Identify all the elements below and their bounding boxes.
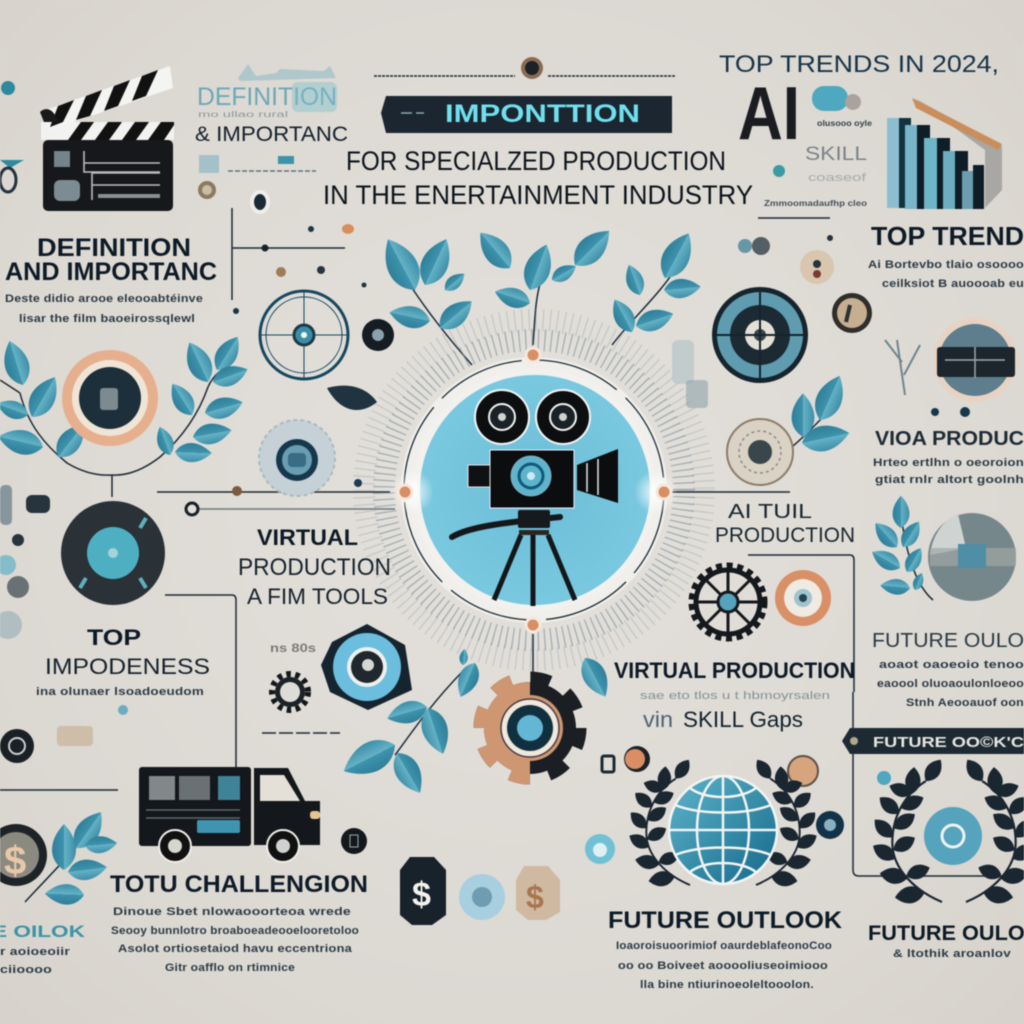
- dark disc with teal center: [61, 501, 165, 605]
- bottom-left coin: [0, 824, 47, 886]
- body text: challenge: Seooy bunnlotro broaboeadeooelooretoloo: [111, 925, 359, 937]
- heading: challenge: TOTU CHALLENGION: [110, 871, 368, 898]
- heading: definition and importance: [5, 234, 217, 286]
- teal outlook fragment: r aoioeoiir: [0, 946, 71, 958]
- center-right leaves: [792, 371, 852, 455]
- brown marker and ring dot: [186, 479, 362, 515]
- body: via production: [873, 457, 1024, 486]
- hexagon lens: [321, 624, 412, 710]
- small truck side coin: [341, 828, 367, 854]
- heading: ai tool production: AI TUIL: [728, 501, 812, 523]
- heading: top impodeness: TOP: [87, 625, 141, 650]
- bottom-left coin: $: [4, 839, 26, 883]
- top banner: [381, 96, 672, 133]
- title: [323, 146, 753, 210]
- body: future outlook right: Stnh Aeooauof oon: [906, 697, 1024, 709]
- small marks under heading: [198, 155, 366, 314]
- heading: faded definition: DEFINITION: [197, 83, 337, 111]
- body: skill gaps: [640, 690, 830, 732]
- body text: challenge: Asolot ortiosetaiod havu eccentriona: [118, 943, 353, 955]
- heading: future outlook right: FUTURE OULO: [872, 630, 1024, 652]
- orange medallion: [775, 570, 831, 626]
- right laurel medal: [869, 756, 1024, 906]
- heading: virtual production: A FIM TOOLS: [247, 584, 388, 609]
- bottom-left leaves: [25, 806, 118, 905]
- beige button: [800, 250, 834, 284]
- AI panel: coaseof: [808, 172, 867, 184]
- small black disc: [362, 319, 394, 351]
- body: future outlook right: [877, 659, 1024, 709]
- body text: future outlook: oo oo Boiveet aooooliuseoimiooo: [618, 960, 828, 972]
- heading: top impodeness: ina olunaer lsoadoeudom: [36, 686, 204, 698]
- bottom center branch: [337, 649, 616, 799]
- large gear with lens: [480, 678, 580, 778]
- body text: future outlook: Ioaoroisuoorimiof oaurdeblafeonoCoo: [616, 940, 832, 952]
- body: skill gaps: vin: [643, 707, 673, 732]
- heading: and importance: & IMPORTANC: [195, 123, 348, 146]
- title: IN THE ENERTAINMENT INDUSTRY: [323, 180, 753, 210]
- orange dollar: [516, 866, 560, 920]
- heading: virtual production: PRODUCTION: [238, 554, 391, 581]
- central emblem: film camera: [364, 320, 704, 660]
- top right small marks: [738, 235, 833, 255]
- globe with laurels: [626, 756, 820, 888]
- AI panel: [738, 71, 873, 208]
- panel: clapperboard: [40, 66, 174, 211]
- body: via production: gtiat rnlr altort goolnh: [875, 474, 1024, 486]
- dollar tag: [400, 857, 446, 925]
- camera body: [468, 449, 618, 508]
- small gear: [272, 674, 308, 710]
- heading: faded definition: [197, 64, 337, 119]
- ring nodes: [398, 348, 671, 632]
- heading: top trends in 2024: TOP TRENDS IN 2024,: [719, 51, 999, 78]
- white ring: [407, 363, 661, 617]
- title: FOR SPECIALZED PRODUCTION: [346, 146, 726, 176]
- body: skill gaps: sae eto tlos u t hbmoyrsalen: [640, 690, 830, 702]
- body text: top trend: Ai Bortevbo tlaio osoooo: [868, 259, 1024, 271]
- target wheel: [260, 291, 348, 379]
- body text: definition: lisar the film baoeirossqlewl: [19, 313, 195, 325]
- body text: definition: Deste didio arooe eleooabtéinve: [5, 293, 203, 305]
- large right gear: [692, 566, 764, 638]
- radial ticks: [384, 340, 684, 640]
- AI panel: Zmmoomadaufhp cleo: [764, 199, 867, 208]
- left medallion: [62, 350, 158, 446]
- body: via production: Hrteo ertlhn o oeoroion: [873, 457, 1024, 469]
- teal outlook fragment: [0, 922, 86, 976]
- heading: virtual production: [238, 525, 391, 609]
- medium dots: [602, 746, 844, 839]
- blue disc: [420, 375, 650, 605]
- body: skill gaps: SKILL Gaps: [683, 707, 803, 732]
- left leaf cluster: [0, 331, 251, 475]
- heading: top impodeness: [36, 625, 210, 698]
- heading: definition and importance: DEFINITION: [37, 234, 191, 262]
- body: future outlook right: eaoool oluoaoulonloeoo: [877, 678, 1024, 690]
- body text: future outlook: lla bine ntiurinoeoleltooolon.: [640, 979, 814, 991]
- pale gear medallion: [259, 420, 335, 496]
- reels: [475, 390, 590, 444]
- future outlook banner: FUTURE OO©K'C: [873, 734, 1024, 751]
- right machinery medallion: [885, 318, 1017, 417]
- teal droplet: [585, 834, 615, 864]
- body text: challenge: [111, 906, 359, 974]
- right leaves: [868, 496, 933, 600]
- heading: ai tool production: PRODUCTION: [715, 524, 855, 547]
- right gray globe: [928, 513, 1016, 601]
- heading: via production: VIOA PRODUC: [875, 428, 1024, 450]
- left edge marks: [0, 81, 50, 639]
- small fragment icon: [672, 340, 708, 408]
- heading: future oulot: & ltothik aroanlov: [893, 948, 1012, 960]
- heading: definition and importance: AND IMPORTANC: [5, 258, 217, 286]
- center top leaves: [375, 222, 701, 365]
- brown coin: [832, 293, 872, 333]
- heading: virtual production right: VIRTUAL PRODUCTION: [614, 658, 855, 683]
- AI panel: olusooo oyle: [817, 119, 873, 128]
- food truck: [139, 767, 320, 862]
- body text: definition: [5, 293, 203, 325]
- tripod: [452, 510, 575, 606]
- body text: top trend: ceilksiot B auoooab eu: [882, 278, 1024, 290]
- heading: top impodeness: IMPODENESS: [45, 654, 210, 679]
- heading: future outlook center: FUTURE OUTLOOK: [608, 907, 843, 934]
- body text: future outlook: [616, 940, 832, 991]
- body text: top trend: [868, 259, 1024, 290]
- bar chart icon: [887, 98, 1002, 209]
- small left coin row: [0, 641, 316, 763]
- small left coin row: ns 80s: [270, 641, 316, 655]
- connector lines: [0, 76, 1000, 876]
- beige gauge: [727, 419, 793, 485]
- body: future outlook right: aoaot oaoeoio tenoo: [879, 659, 1024, 671]
- dollar tag: $: [412, 876, 431, 914]
- future outlook banner: [842, 728, 1024, 754]
- body text: challenge: Gitr oafflo on rtimnice: [165, 962, 295, 974]
- heading: virtual production: VIRTUAL: [257, 525, 358, 550]
- AI panel: SKILL: [805, 144, 867, 165]
- heading: future oulot: [868, 922, 1024, 960]
- AI panel: AI: [738, 71, 800, 155]
- orange dollar: $: [526, 879, 544, 915]
- ring glows: [390, 470, 678, 514]
- dark leaf: [327, 386, 377, 410]
- top icon: small eye: [521, 57, 543, 79]
- top banner: IMPONTTION: [445, 100, 640, 128]
- heading: ai tool production: [715, 501, 855, 547]
- blue token: [459, 874, 505, 920]
- heading: faded definition: mo ullao rural: [198, 110, 288, 119]
- body text: challenge: Dinoue Sbet nlowaooorteoa wrede: [113, 906, 351, 918]
- teal outlook fragment: ciioooo: [0, 964, 52, 976]
- heading: top trend: TOP TREND: [871, 221, 1024, 251]
- right dark lens disc: [712, 287, 808, 383]
